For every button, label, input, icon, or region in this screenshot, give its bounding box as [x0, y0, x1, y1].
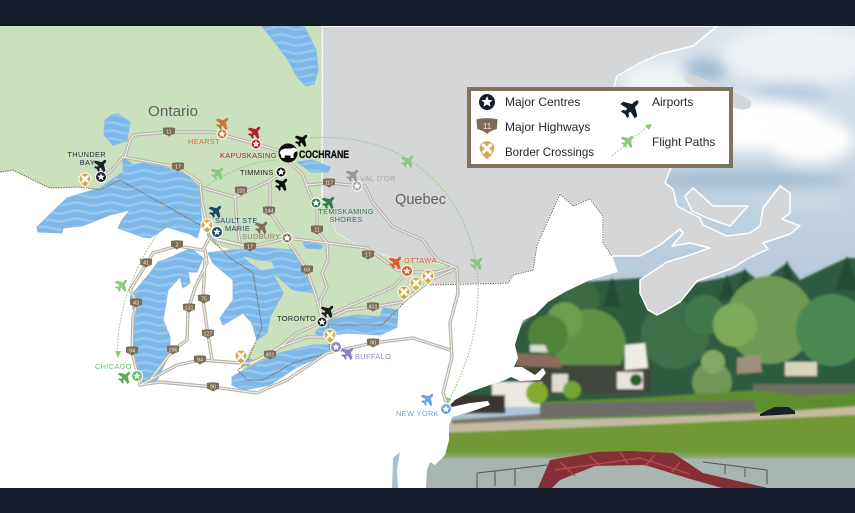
legend: border crossings — [479, 141, 594, 160]
shield 196 — [167, 345, 179, 355]
shield 144 — [263, 206, 275, 216]
city: Hearst: HEARST — [188, 137, 220, 146]
shield 69: 69 — [304, 268, 310, 274]
flight path arrowheads — [115, 351, 451, 404]
shield 94 west — [126, 346, 138, 356]
shield 41: 41 — [143, 260, 149, 266]
city: Ottawa: OTTAWA — [404, 256, 437, 265]
city: Temiskaming Shores — [311, 192, 374, 224]
shield 94 west: 94 — [129, 348, 135, 354]
legend panel — [469, 89, 731, 166]
shield 117 — [323, 178, 335, 188]
Lake Michigan — [130, 250, 203, 383]
city: Val d'Or — [343, 165, 396, 191]
shield 144: 144 — [264, 208, 274, 214]
legend: major highways — [476, 118, 590, 134]
shield 2: 2 — [176, 242, 178, 248]
highway shields — [126, 127, 379, 392]
shield 2 — [171, 240, 183, 250]
shield 401 west: 401 — [266, 352, 274, 358]
legend: flight paths — [612, 124, 715, 156]
Lake Nipigon — [104, 114, 130, 145]
shield 131 — [183, 303, 195, 313]
shield 90 east: 90 — [370, 340, 376, 346]
shield 17 south — [244, 242, 256, 252]
city: Sault Ste Marie: MARIE — [225, 224, 250, 233]
James Bay — [262, 26, 318, 86]
shield 94 east: 94 — [197, 358, 203, 364]
shield 401 west — [264, 350, 276, 360]
city: Buffalo — [330, 342, 391, 363]
Ontario label: Ontario — [148, 103, 198, 120]
Quebec label: Quebec — [395, 191, 446, 208]
shield 11 — [163, 127, 175, 137]
land: Quebec and Maritimes (grey) — [322, 26, 800, 315]
shield 401 east: 401 — [368, 304, 378, 310]
shield 94 east — [194, 355, 206, 365]
city: New York — [396, 389, 452, 418]
Lake Superior — [37, 157, 202, 238]
city: Ottawa — [386, 252, 437, 276]
shield 101 — [235, 186, 247, 196]
city: Chicago: CHICAGO — [95, 362, 132, 371]
shield 117: 117 — [325, 180, 333, 186]
Lake Ontario — [315, 308, 398, 337]
city: Thunder Bay — [67, 150, 111, 182]
legend: major centres — [479, 94, 580, 110]
legend: border crossings: Border Crossings — [505, 145, 594, 159]
shield 11: 11 — [166, 130, 172, 136]
city: Sault Ste Marie: SAULT STE — [215, 216, 258, 225]
shield 17 — [172, 162, 184, 172]
city: Timmins: TIMMINS — [240, 168, 274, 177]
city: Temiskaming Shores: SHORES — [329, 215, 363, 224]
city: Cochrane with bear icon: COCHRANE — [299, 149, 349, 161]
city: Buffalo: BUFFALO — [355, 352, 391, 361]
shield 75: 75 — [201, 296, 207, 302]
legend: major highways: Major Highways — [505, 120, 590, 134]
shield 131: 131 — [184, 306, 194, 312]
shield 11 south: 11 — [314, 228, 320, 234]
city: Val d'Or: VAL D'OR — [360, 174, 396, 183]
city: Temiskaming Shores: TEMISKAMING — [318, 207, 374, 216]
top dark bar — [0, 0, 855, 26]
shield 17 east: 17 — [365, 252, 371, 258]
shield 43: 43 — [133, 300, 139, 306]
legend: major centres: Major Centres — [505, 95, 580, 109]
red footbridge — [477, 451, 768, 488]
flight paths — [117, 137, 478, 402]
highway network — [101, 132, 458, 405]
labels: provinces — [148, 103, 446, 208]
Lake St Clair — [243, 359, 252, 366]
shield 127 — [202, 329, 214, 339]
car on the road — [760, 407, 795, 416]
Lake Huron — [208, 248, 317, 340]
Anticosti Island — [684, 75, 751, 110]
legend: flight paths: Flight Paths — [652, 135, 715, 149]
international border dotted line — [0, 170, 612, 380]
shield 90 west — [207, 382, 219, 392]
provincial boundary dotted line — [322, 26, 456, 267]
city: Sudbury — [242, 217, 292, 243]
city: Thunder Bay: BAY — [80, 158, 95, 167]
shield 17 south: 17 — [247, 244, 253, 250]
flight path planes — [112, 151, 487, 295]
shield 90 east — [367, 338, 379, 348]
city: Thunder Bay: THUNDER — [67, 150, 106, 159]
shield 90 west: 90 — [210, 384, 216, 390]
city: Cochrane with bear icon — [278, 130, 349, 162]
city: Kapuskasing: KAPUSKASING — [220, 151, 277, 160]
Lake Abitibi — [297, 160, 330, 172]
Lake Erie — [232, 345, 330, 390]
city: Toronto: TORONTO — [277, 314, 316, 323]
legend: airports — [617, 94, 693, 122]
city: New York: NEW YORK — [396, 409, 439, 418]
shield 401 east — [367, 302, 379, 312]
shield 196: 196 — [168, 348, 178, 354]
shield 11 south — [311, 225, 323, 235]
city: Sault Ste Marie — [206, 201, 258, 238]
Manitoulin Island — [243, 256, 274, 270]
border crossings — [79, 173, 434, 364]
city: Toronto — [277, 301, 338, 327]
land: United States (white) — [0, 150, 618, 488]
shield 41 — [140, 258, 152, 268]
city: Kapuskasing — [220, 122, 277, 160]
city: Sudbury: SUDBURY — [242, 232, 280, 241]
lakes — [37, 26, 398, 390]
city: Chicago — [95, 362, 142, 387]
shield 17: 17 — [175, 164, 181, 170]
shield 127: 127 — [204, 332, 212, 338]
legend: major highways: 11 — [483, 122, 492, 131]
city: Hearst — [188, 113, 233, 146]
land: Ontario (green) — [0, 26, 456, 372]
legend: airports: Airports — [652, 95, 693, 109]
shield 17 east — [362, 250, 374, 260]
city: Timmins — [240, 167, 292, 194]
Lake Nipissing — [303, 241, 323, 249]
shield 75 — [198, 294, 210, 304]
bottom dark bar — [0, 488, 855, 513]
shield 43 — [130, 298, 142, 308]
shield 69 — [301, 265, 313, 275]
shield 101: 101 — [236, 188, 246, 194]
Prince Edward Island — [685, 188, 748, 226]
